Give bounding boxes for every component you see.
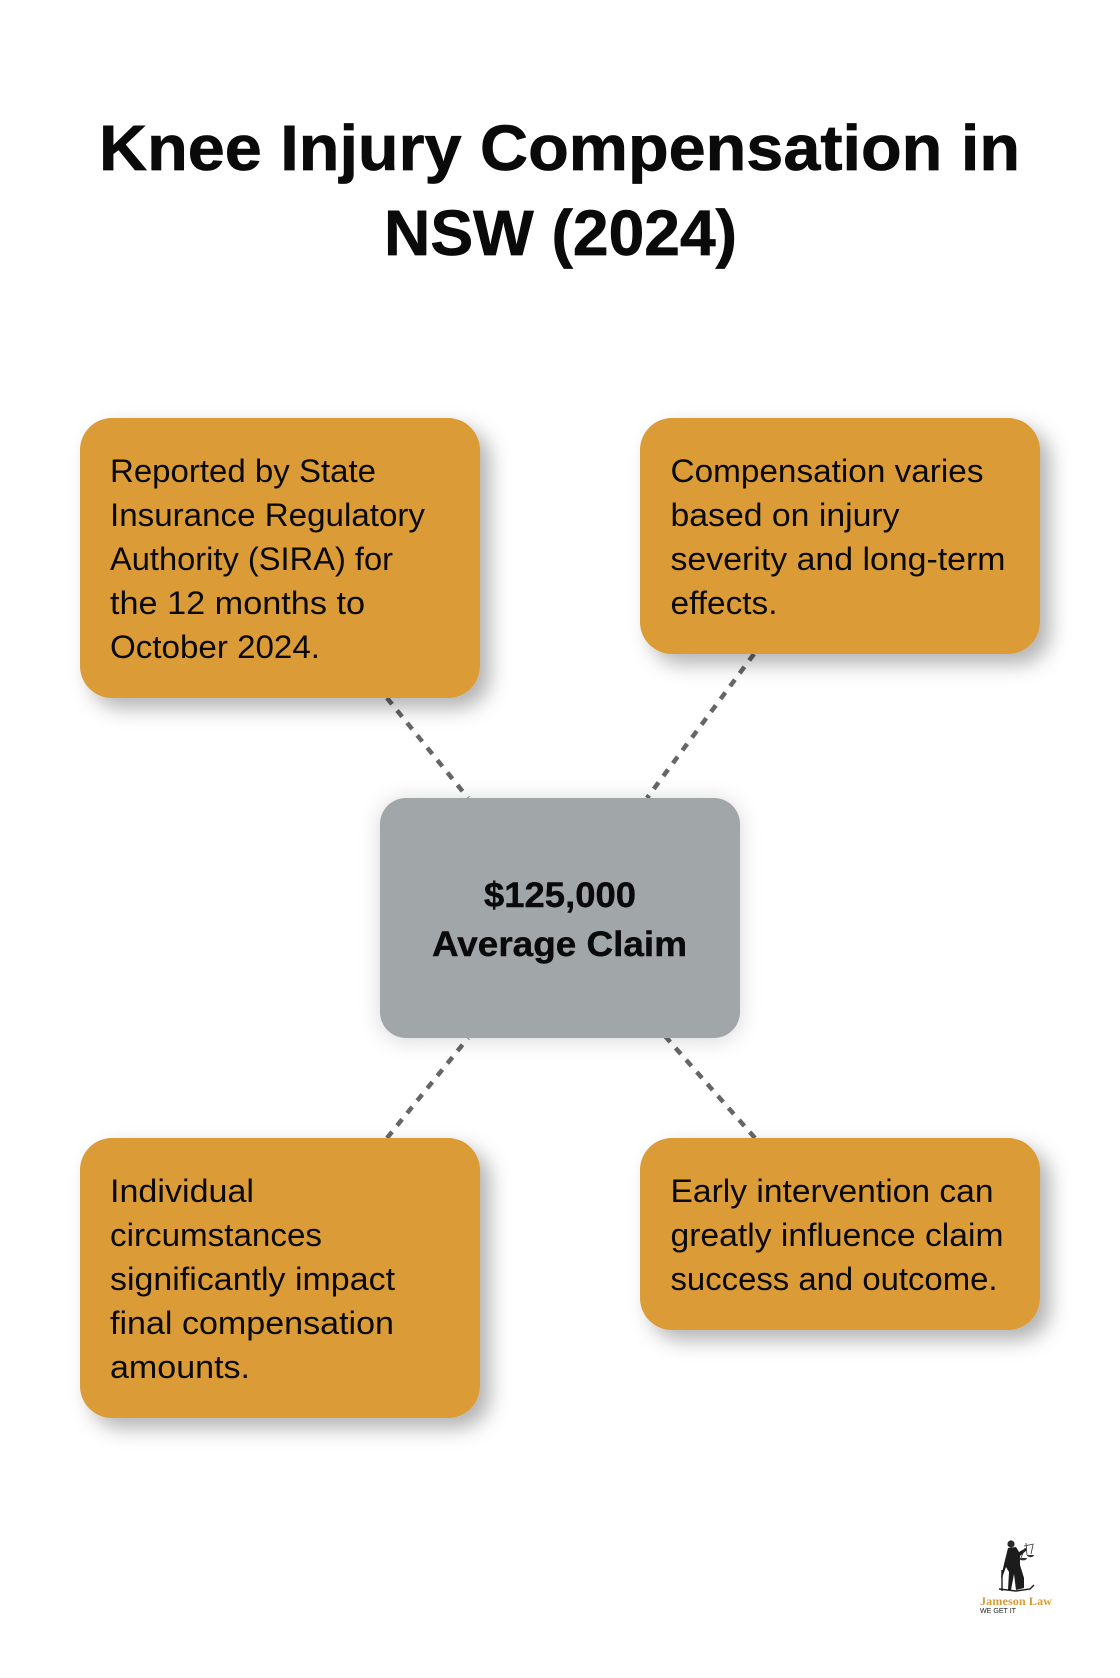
panel: early intervention note (640, 1138, 1040, 1330)
connector: top-left card to centre (387, 698, 468, 798)
panel: early intervention note: greatly influence claim (670, 1217, 1004, 1253)
panel: individual circumstances note: circumstances (110, 1217, 322, 1253)
panel: compensation varies note (640, 418, 1040, 654)
title: NSW (2024) (384, 197, 737, 269)
panel: SIRA source note: Insurance Regulatory (110, 497, 425, 533)
panel: early intervention note: success and outcome. (670, 1261, 998, 1297)
panel: early intervention note: Early intervention can (670, 1173, 994, 1209)
panel: SIRA source note (80, 418, 480, 698)
panel: SIRA source note: Reported by State (110, 453, 376, 489)
panel: individual circumstances note: significantly impact (110, 1261, 395, 1297)
panel: compensation varies note: based on injury (670, 497, 900, 533)
panel: SIRA source note: Authority (SIRA) for (110, 541, 393, 577)
panel: individual circumstances note: final compensation (110, 1305, 394, 1341)
panel: individual circumstances note: amounts. (110, 1349, 250, 1385)
logo: Jameson Law: Jameson Law (980, 1594, 1052, 1608)
panel: individual circumstances note (80, 1138, 480, 1418)
connector: bottom-right card to centre (665, 1036, 755, 1138)
panel: compensation varies note: severity and long-term (670, 541, 1006, 577)
panel: average claim centre: $125,000 (484, 876, 636, 915)
connector: bottom-left card to centre (387, 1038, 468, 1138)
panel: average claim centre (380, 798, 740, 1038)
icon: lady justice (999, 1540, 1034, 1591)
panel: compensation varies note: Compensation varies (670, 453, 984, 489)
title: Knee Injury Compensation in (99, 112, 1020, 184)
panel: average claim centre: Average Claim (432, 925, 687, 964)
panel: compensation varies note: effects. (670, 585, 778, 621)
title (99, 112, 1020, 269)
panel: SIRA source note: the 12 months to (110, 585, 365, 621)
connector: top-right card to centre (647, 654, 754, 798)
panel: SIRA source note: October 2024. (110, 629, 320, 665)
logo: Jameson Law: WE GET IT (980, 1608, 1017, 1615)
logo: Jameson Law (980, 1540, 1052, 1615)
panel: individual circumstances note: Individual (110, 1173, 254, 1209)
